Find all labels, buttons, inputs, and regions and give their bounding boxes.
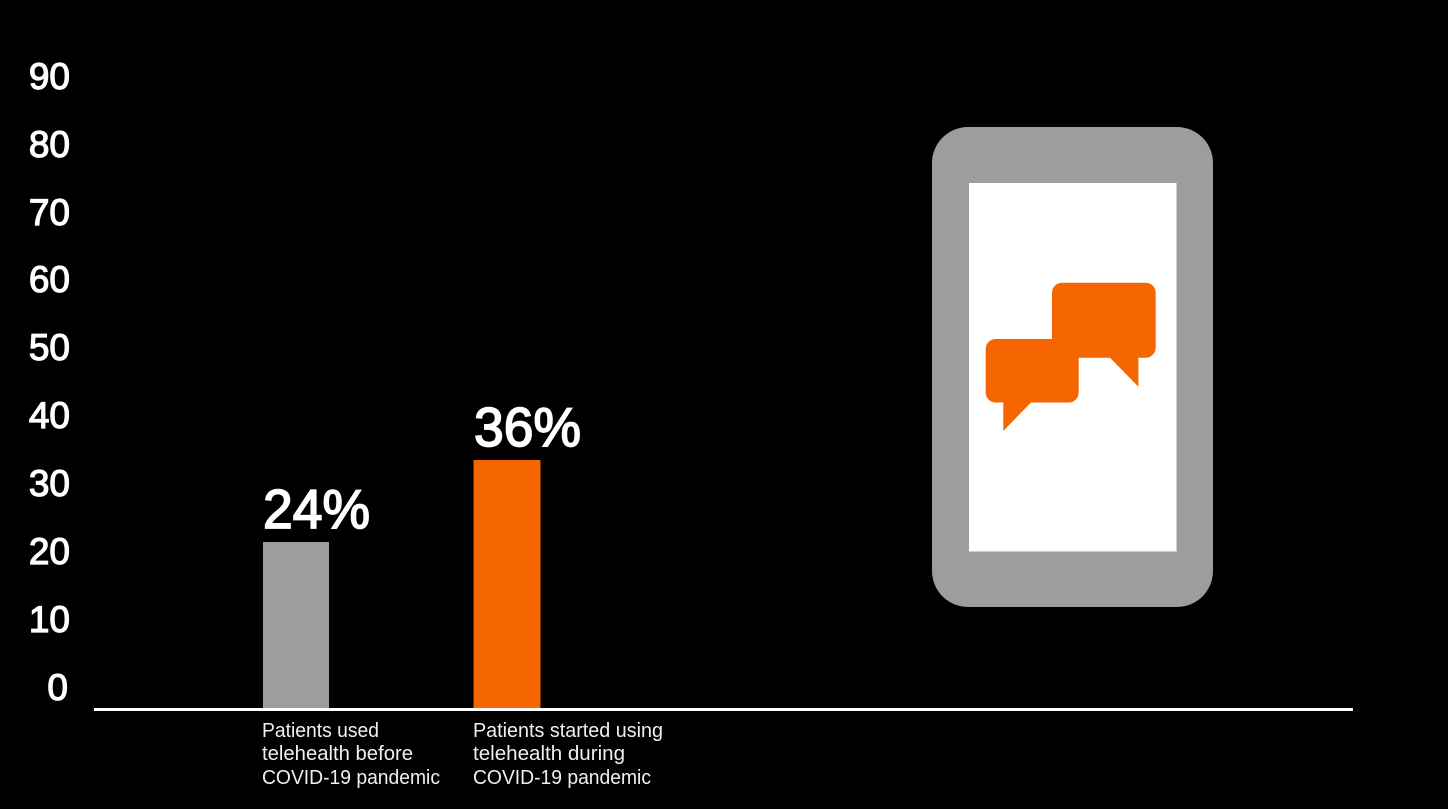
category label: during pandemic: COVID-19 pandemic [473, 767, 651, 789]
category label: during pandemic: Patients started using [473, 720, 663, 742]
y axis labels: 0 [47, 667, 68, 708]
y axis labels: 40 [29, 395, 70, 436]
phone screen [969, 183, 1176, 552]
y axis labels: 20 [29, 531, 70, 572]
category label: during pandemic: telehealth during [473, 743, 625, 765]
y axis labels: 70 [29, 192, 70, 233]
y axis labels: 90 [29, 56, 70, 97]
category label: before pandemic: Patients used [262, 720, 379, 742]
y axis labels: 10 [29, 599, 70, 640]
value label: 24%: 24% [263, 478, 370, 540]
category label: during pandemic [473, 720, 663, 789]
category label: before pandemic: telehealth before [262, 743, 413, 765]
icon: right chat bubble [1052, 283, 1156, 387]
y axis labels: 50 [29, 327, 70, 368]
y axis labels [29, 56, 70, 708]
y axis labels: 30 [29, 463, 70, 504]
y axis labels: 80 [29, 124, 70, 165]
category label: before pandemic: COVID-19 pandemic [262, 767, 440, 789]
icon: smartphone with chat bubbles [932, 127, 1213, 607]
bar: before pandemic, grey [263, 542, 329, 709]
category label: before pandemic [262, 720, 440, 789]
value label: 36%: 36% [474, 396, 581, 458]
bar: during pandemic, orange [474, 460, 540, 709]
icon: left chat bubble [986, 339, 1079, 431]
y axis labels: 60 [29, 259, 70, 300]
x axis line [94, 708, 1353, 711]
phone body [932, 127, 1213, 607]
